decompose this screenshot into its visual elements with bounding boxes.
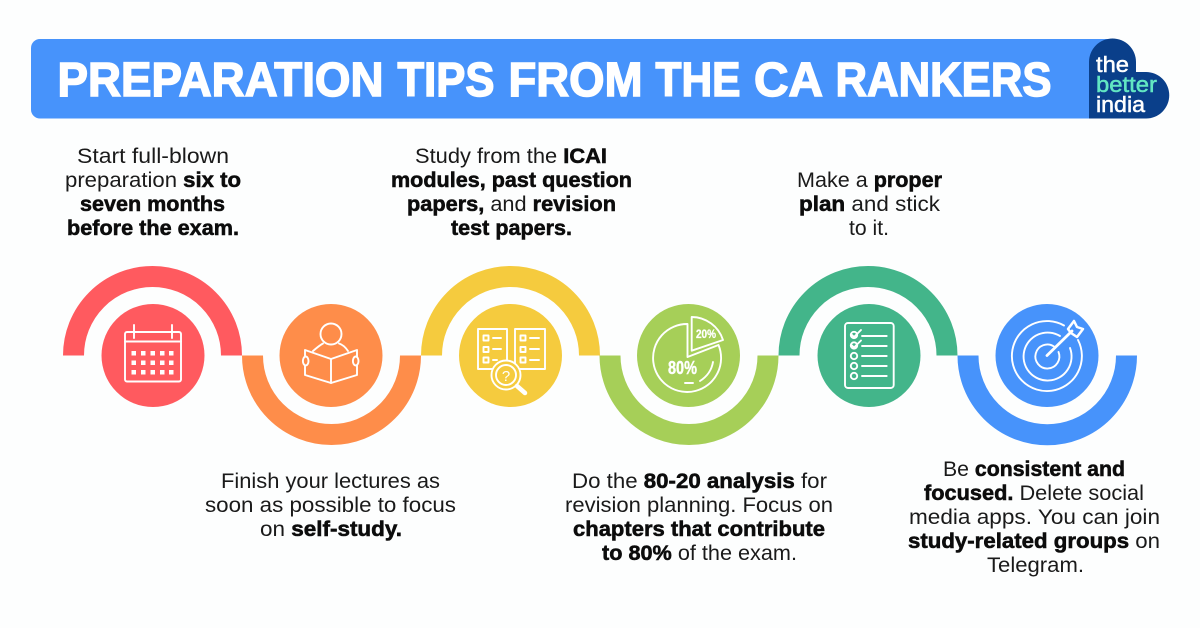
icon: target with arrow [996, 304, 1098, 407]
logo: the better india: india [1096, 92, 1146, 117]
wave arc: yellow [432, 276, 590, 356]
text: tip 6: Telegram. [987, 553, 1084, 577]
text: tip 1: Start full-blown [77, 144, 229, 168]
text: tip 5: to it. [849, 216, 889, 240]
text: tip 3: modules, past question [391, 168, 632, 192]
text: tip 4: Do the 80-20 analysis for [572, 469, 827, 493]
title: THE [656, 54, 740, 107]
text: tip 1 [65, 144, 241, 240]
text: tip 2: Finish your lectures as [221, 469, 440, 493]
text: tip 5: Make a proper [797, 168, 943, 192]
text: tip 6: study-related groups on [908, 529, 1160, 553]
text: tip 5: plan and stick [799, 192, 940, 216]
text: tip 1: preparation six to [65, 168, 241, 192]
icon: checklist [818, 304, 920, 407]
text: tip 2 [205, 469, 456, 541]
title [58, 54, 1052, 107]
text: tip 4 [565, 469, 833, 565]
icon: question papers with magnifier [459, 304, 562, 407]
icon: person reading a book [280, 304, 382, 407]
text: tip 3: Study from the ICAI [415, 144, 607, 168]
icon: 80-20 pie chart: 20% [696, 327, 716, 341]
icon: 80-20 pie chart: 80% [668, 358, 697, 378]
wave arc: blue [968, 356, 1126, 435]
wave arc: light green [610, 356, 768, 434]
text: tip 6 [908, 457, 1160, 577]
text: tip 2: soon as possible to focus [205, 493, 456, 517]
icon: calendar [102, 304, 204, 407]
text: tip 1: seven months [80, 192, 225, 216]
text: tip 4: revision planning. Focus on [565, 493, 833, 517]
wave arc: red [74, 276, 232, 356]
text: tip 4: chapters that contribute [573, 517, 825, 541]
text: tip 5 [797, 168, 943, 240]
text: tip 6: media apps. You can join [909, 505, 1160, 529]
logo: the better india [1089, 38, 1169, 118]
text: tip 2: on self-study. [260, 517, 402, 541]
text: tip 4: to 80% of the exam. [602, 541, 797, 565]
title: RANKERS [836, 54, 1052, 107]
icon: 80-20 pie chart [637, 304, 740, 407]
text: tip 6: focused. Delete social [924, 481, 1144, 505]
text: tip 3 [391, 144, 632, 240]
icon: question papers with magnifier: ? [502, 368, 510, 385]
title: PREPARATION [58, 54, 384, 107]
text: tip 6: Be consistent and [943, 457, 1125, 481]
title: CA [754, 54, 823, 107]
wave arc: teal [789, 276, 947, 356]
title: TIPS [398, 54, 494, 107]
title banner [31, 39, 1112, 118]
text: tip 1: before the exam. [67, 216, 239, 240]
text: tip 3: papers, and revision [407, 192, 616, 216]
logo: the better india: the [1096, 52, 1129, 77]
text: tip 3: test papers. [451, 216, 572, 240]
logo: the better india: better [1096, 72, 1157, 97]
wave arc: orange [252, 356, 410, 434]
title: FROM [508, 54, 642, 107]
